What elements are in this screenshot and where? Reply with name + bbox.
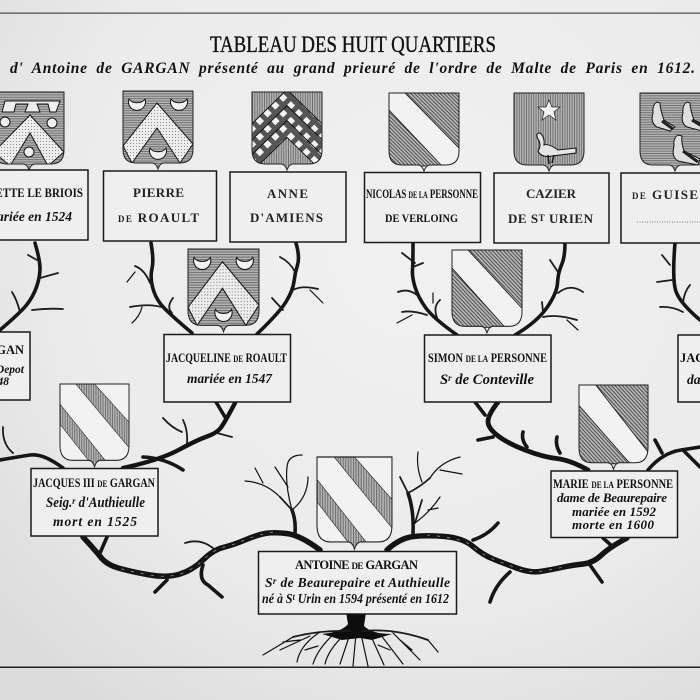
panel: Antoine de Gargan: Urin en 1594 présenté en 1612 <box>295 591 449 606</box>
branches: central tree <box>83 452 627 602</box>
shield: Roault <box>123 91 193 169</box>
panel: Nicolas de la Personne: NICOLAS DE LA PERSONNE <box>366 187 478 201</box>
branches: right edge tree <box>657 243 700 320</box>
panel: Cazier de St Urien: URIEN <box>545 211 594 226</box>
shield: Jacqueline de Roault <box>188 249 259 332</box>
panel: Le Briois <box>0 170 88 240</box>
shield: Simon de la Personne <box>452 250 522 333</box>
panel: Anne d'Amiens <box>230 172 346 242</box>
shield: Jacques III <box>60 384 129 467</box>
panel: Antoine de Gargan: t <box>293 592 295 602</box>
panel: Jacques III de Gargan: mort en 1525 <box>53 514 137 529</box>
panel: Antoine de Gargan <box>258 552 456 614</box>
panel: Simon de la Personne <box>424 335 551 402</box>
panel: de Guise <box>621 173 700 243</box>
shield: Marie de la Personne <box>579 385 648 469</box>
panel: Cazier de St Urien: CAZIER <box>526 186 577 201</box>
panel: Anne d'Amiens: ANNE <box>267 186 308 201</box>
panel: Pierre de Roault: DE ROAULT <box>118 210 199 225</box>
panel: Cazier de St Urien: DE S <box>508 211 538 226</box>
panel: Marie de la Personne <box>551 471 678 538</box>
panel: Marie de la Personne: MARIE DE LA PERSONNE <box>553 477 673 491</box>
panel: Marie de la Personne: mariée en 1592 <box>572 504 656 519</box>
panel: Simon de la Personne: SIMON DE LA PERSONNE <box>428 351 547 365</box>
panel: Cazier de St Urien: T <box>539 213 545 223</box>
panel: de Guise: DE GUISE <box>632 187 698 202</box>
panel: Antoine de Gargan: de Beaurepaire et Authieulle <box>277 575 450 590</box>
panel: Antoine de Gargan: né à S <box>262 591 297 606</box>
panel: Antoine de Gargan: r <box>273 576 277 586</box>
panel: Antoine de Gargan: ANTOINE DE GARGAN <box>295 558 418 572</box>
branches: Jacqueline tree <box>127 243 323 334</box>
panel: Jacqueline de Roault <box>164 334 290 402</box>
panel: Marie de la Personne: dame de Beaurepaire <box>557 490 667 505</box>
panel: Nicolas de la Personne <box>364 172 480 242</box>
branches: Simon tree <box>397 243 583 335</box>
panel: Jacques III de Gargan: Seig. <box>46 495 75 511</box>
panel: Marie de la Personne: morte en 1600 <box>572 517 654 532</box>
panel: Simon de la Personne: de Conteville <box>452 372 534 388</box>
panel: Simon de la Personne: r <box>448 373 452 383</box>
panel: Cazier de St Urien <box>494 173 609 243</box>
panel: Jacques III de Gargan: d'Authieulle <box>75 495 145 511</box>
panel: Anne d'Amiens: D'AMIENS <box>250 210 323 225</box>
panel: Jacqueline de Roault: JACQUELINE DE ROAULT <box>166 351 288 365</box>
panel: Jacques III de Gargan: JACQUES III DE GARGAN <box>33 476 155 490</box>
panel: Pierre de Roault: PIERRE <box>133 185 184 200</box>
panel: Jacq right <box>678 335 700 402</box>
panel: Gargan left <box>0 332 30 400</box>
panel: Jacques III de Gargan: r <box>72 496 76 506</box>
roots <box>263 612 438 666</box>
panel: Pierre de Roault <box>104 171 216 241</box>
frame rule: top <box>0 12 700 14</box>
panel: Jacqueline de Roault: mariée en 1547 <box>187 371 273 386</box>
panel: Simon de la Personne: S <box>440 372 448 388</box>
shield: Le Briois <box>0 92 64 170</box>
panel: Antoine de Gargan: S <box>265 575 273 590</box>
shield: Antoine de Gargan <box>317 457 392 549</box>
shield: Cazier <box>514 93 584 171</box>
branches: upper left tree <box>0 243 63 330</box>
branches: Jacques link <box>0 402 235 470</box>
panel: Jacques III de Gargan <box>31 468 158 536</box>
shield: La Personne de Verloing <box>389 93 459 171</box>
title: TABLEAU DES HUIT QUARTIERS <box>210 32 496 57</box>
frame rule: bottom <box>0 666 700 668</box>
subtitle: d' Antoine de GARGAN présenté au grand prieuré de l'ordre de Malte de Paris en 1612. <box>10 60 695 77</box>
panel: Nicolas de la Personne: DE VERLOING <box>385 213 458 225</box>
branches: Marie link <box>475 402 700 470</box>
shield: Amiens <box>250 92 324 170</box>
shield: Guise <box>640 93 700 171</box>
